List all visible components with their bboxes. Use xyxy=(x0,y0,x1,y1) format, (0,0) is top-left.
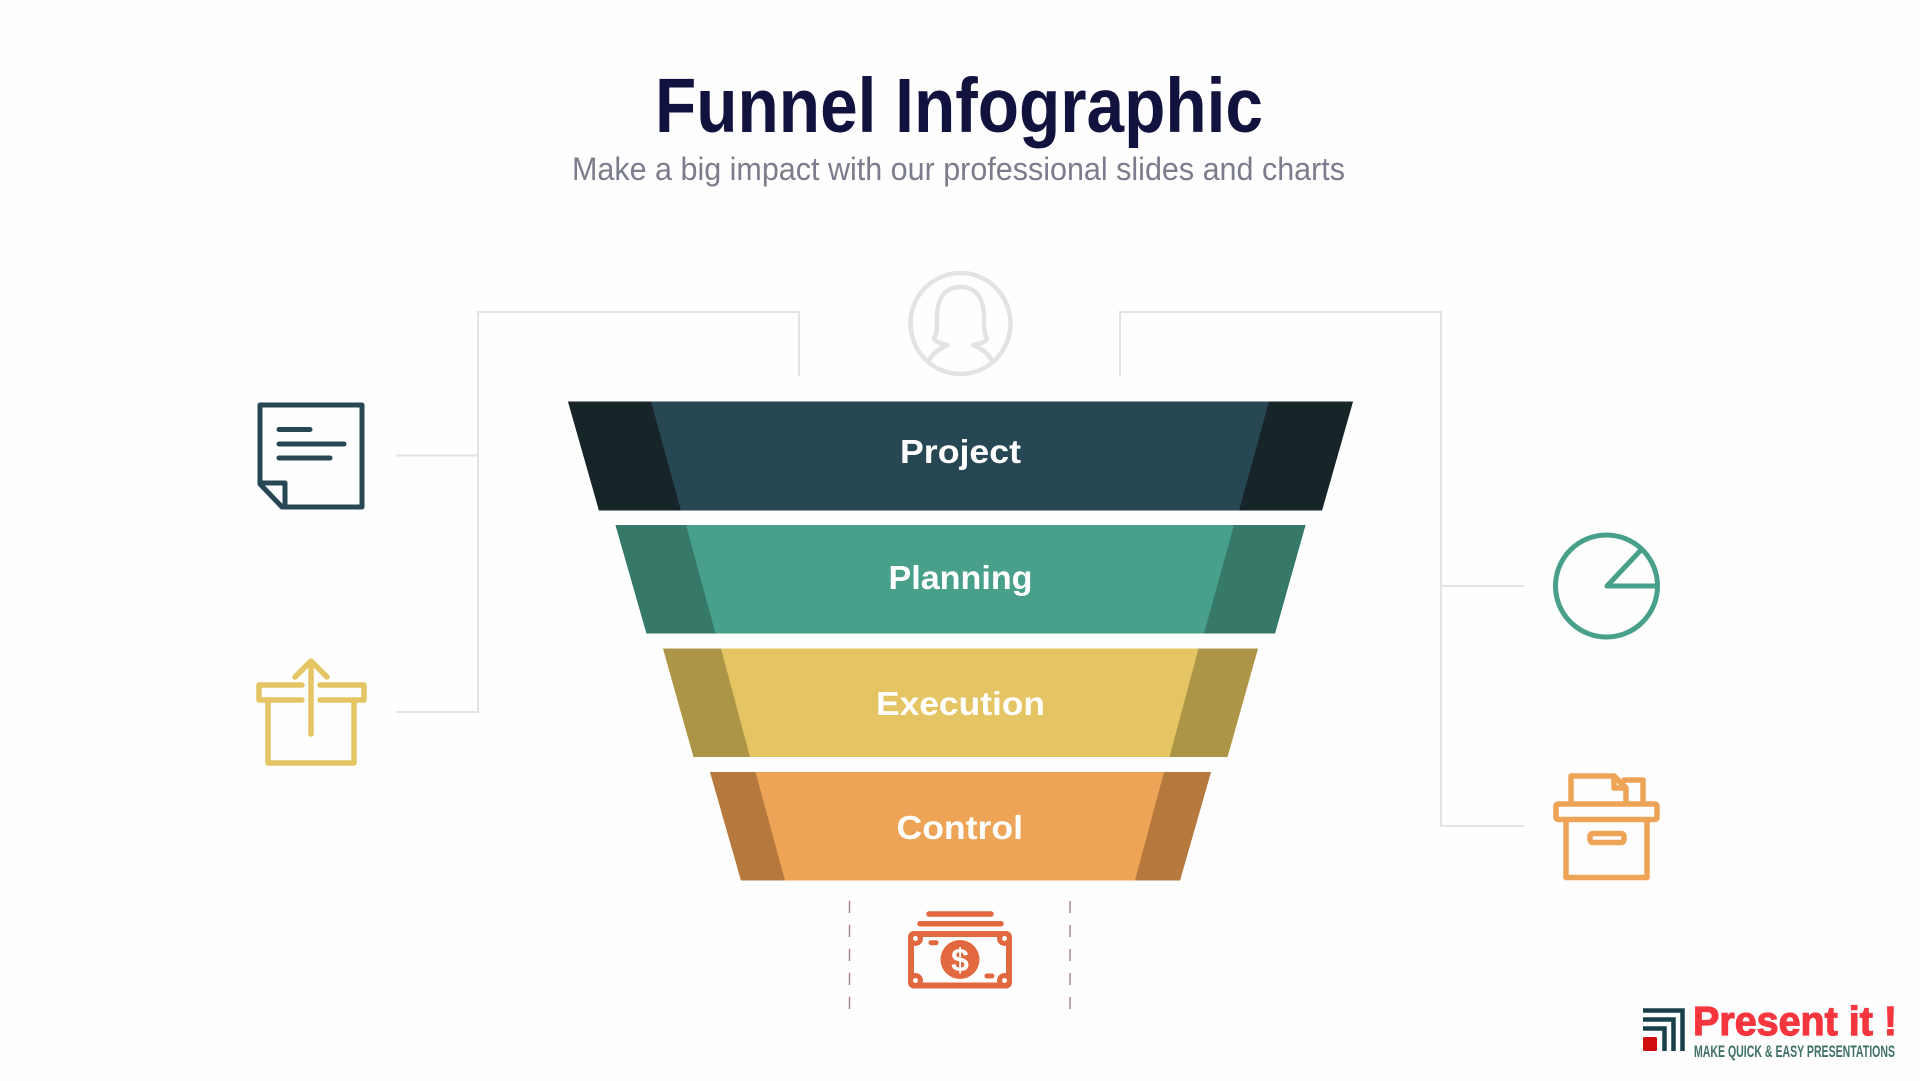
funnel xyxy=(568,402,1353,880)
logo mark xyxy=(1643,1010,1682,1051)
funnel tier: Control xyxy=(710,772,1211,880)
funnel tier: Project: Project xyxy=(900,433,1021,470)
funnel tier: Execution xyxy=(663,648,1258,757)
icon: document note xyxy=(260,405,362,507)
logo wordmark: Present it ! xyxy=(1693,998,1897,1044)
funnel tier: Project xyxy=(568,402,1353,510)
funnel tier: Execution: Execution xyxy=(876,685,1045,722)
icon: person xyxy=(910,273,1010,374)
connector lines: left xyxy=(396,312,799,712)
funnel tier: Control: Control xyxy=(896,809,1023,846)
icon: pie chart xyxy=(1556,535,1658,637)
connector lines: right xyxy=(1120,312,1524,826)
dashed guides beside banknotes xyxy=(850,901,1070,1009)
icon: banknotes xyxy=(908,914,1012,988)
icon: box with upward arrow xyxy=(259,661,364,763)
funnel tier: Planning: Planning xyxy=(888,559,1032,596)
icon: banknotes: $ xyxy=(951,942,969,978)
title: Funnel Infographic xyxy=(655,63,1263,149)
subtitle: Make a big impact with our professional slides and charts xyxy=(572,151,1345,187)
icon: archive box with files xyxy=(1556,776,1657,878)
funnel tier: Planning xyxy=(616,525,1306,634)
logo: Present it xyxy=(1643,998,1897,1061)
